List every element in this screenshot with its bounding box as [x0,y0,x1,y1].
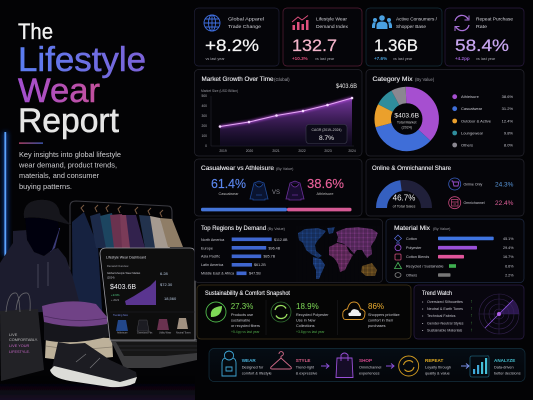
step: style [271,352,317,376]
icon: leaf [206,302,226,322]
legend: Athleisure [461,94,480,99]
tablet dashboard: +9.6% [111,293,120,297]
title: The [18,19,53,44]
panel: category mix donut: (2024) [402,126,412,130]
tablet dashboard: (2024) [107,276,115,280]
step: analyze [470,356,521,377]
CAGR callout: 8.7% [319,135,334,142]
material rows: 45.1% [503,237,514,241]
panel: top regions [194,219,382,282]
KPI card: active consumers: Active Consumers / [396,16,438,22]
laptop keyboard [110,339,197,368]
title underline [19,142,43,144]
panel: trend watch: Trend Watch [422,290,452,297]
panel: online and omnichannel share: Online & Omnichannel Share [372,165,452,172]
hero photo: lifestyle wear still life [0,132,197,400]
region bars: North America [201,238,225,242]
KPI card: trade change [194,8,279,66]
step: style: Trend-right [296,366,315,370]
step: repeat: REPEAT [425,358,443,363]
panel: top regions: Top Regions by Demand [201,225,267,232]
panel: market growth line chart: (Global) [274,77,290,82]
panel: sustainability snapshot: Use in New [296,318,316,322]
x axis [219,149,356,153]
intro text: wear demand, product trends, [18,162,117,170]
KPI card: repeat purchase: Repeat Purchase [476,16,513,22]
panel: online and omnichannel share: Omnichannel [464,201,485,205]
trend list: • [422,321,424,325]
radar [479,294,519,334]
KPI card: trade change: Global Apparel [228,16,264,22]
title: Lifestyle [18,41,146,79]
icon: cloud [343,302,365,320]
material rows: 16.7% [503,255,514,259]
panel: material mix [386,219,524,282]
trend list: Sustainable Materials [427,328,462,332]
x axis: 2020 [246,149,253,153]
panel: sustainability snapshot: purchases [368,324,386,328]
icon: purple hoodie [286,181,304,200]
tablet dashboard: Oversized Fits [137,332,153,334]
panel: sustainability snapshot: Recycled Polyester [296,313,329,317]
KPI card: repeat purchase: vs last year [476,57,496,61]
step: wear: Designed for [242,366,264,370]
tablet dashboard: 18,560 [164,296,177,301]
panel: casualwear vs athleisure: Athleisure [317,192,333,196]
KPI card: active consumers: +7.6% [374,56,387,61]
KPI card: repeat purchase: +4.2pp [455,56,470,61]
tablet dashboard: Global Lifestyle Wear Market [107,271,141,275]
legend: 31.2% [502,106,513,111]
split bar [201,208,352,211]
floor [0,372,195,400]
tablet dashboard: Trending Now [113,314,128,317]
step: wear: comfort & lifestyle [242,372,272,376]
panel: sustainability snapshot: 18.9% [296,302,319,311]
region bars: Middle East & Africa [201,272,235,276]
material rows: Cotton Blends [406,255,429,259]
tablet dashboard [100,248,195,340]
intro text: materials, and consumer [19,172,100,180]
y axis: 200 [201,124,207,128]
panel: casualwear vs athleisure: Casualwear vs Athleisure [201,165,275,172]
icon: recycle [271,302,291,322]
KPI card: demand index: +10.3% [292,56,308,61]
trend list [422,299,473,334]
trend list: Oversized Silhouettes [427,300,463,304]
y axis: 400 [201,104,207,108]
shopping bag: COMFORTABLY. [9,338,38,342]
panel: casualwear vs athleisure [194,159,362,216]
region bars: Latin America [201,263,224,267]
region bars: $47.5B [249,272,261,276]
x axis: 2022 [298,149,306,153]
KPI card: demand index [283,8,362,66]
trend list: • [422,314,424,318]
KPI card: repeat purchase: 58.4% [455,37,509,55]
flow strip: wear to analyze [209,348,525,382]
panel: sustainability snapshot: or recycled fibers [231,324,260,328]
step: shop: Omnichannel [359,366,382,370]
step: wear [222,351,272,376]
KPI card: active consumers: Shopper Base [396,24,426,29]
intro text [18,151,121,191]
KPI card: demand index: Demand Index [316,24,349,29]
panel: online and omnichannel share: of Total Sales [393,204,415,208]
shopping bag: LIVE [9,333,18,337]
tablet dashboard: Athleisure [117,332,128,334]
half donut gauge [382,186,426,208]
material rows: Recycled / Sustainable [406,264,444,268]
step: repeat [399,356,451,376]
trend list: ↑ [470,299,473,305]
panel: sustainability snapshot: Sustainability & Comfort Snapshot [205,290,290,297]
panel: online and omnichannel share [366,159,524,216]
y axis: 100 [201,134,207,138]
tablet dashboard: Utility Wear [159,332,171,334]
trend list: ↑ [470,313,473,319]
panel: sustainability snapshot: +5.4pp vs last year [231,330,260,334]
region bars: $96.4B [268,246,281,250]
region bars: $85.7B [264,254,276,258]
panel: sustainability snapshot: comfort in their [368,318,394,322]
panel: category mix donut: $403.6B [394,112,420,120]
panel: sustainability snapshot: 86% [368,302,384,311]
KPI card: demand index: 132.7 [292,37,337,55]
step: style: STYLE [296,358,311,363]
icon: globe [204,15,220,31]
material rows: Polyester [406,246,422,250]
panel: sustainability snapshot: Shoppers prioritize [368,313,400,317]
x axis: 2024 [348,149,356,153]
step: analyze: ANALYZE [494,358,515,363]
region bars: Asia Pacific [201,254,220,258]
trend list: Technical Fabrics [427,314,456,318]
legend: 12.4% [502,118,513,124]
tablet dashboard: + 2023 [111,298,120,302]
icon: repeat arrows [455,15,469,31]
intro text: Key insights into global lifestyle [19,151,121,159]
icon: blue hoodie [250,181,268,200]
y axis: 0 [205,144,207,148]
icon: omnichannel store [449,197,461,209]
region bars: $112.8B [274,238,288,242]
panel: casualwear vs athleisure: (By Value) [276,167,294,171]
trend list: • [422,300,424,304]
panel: casualwear vs athleisure: VS [272,190,280,196]
panel: category mix donut: (By Value) [415,77,435,82]
panel: casualwear vs athleisure: 38.6% [307,176,344,191]
shopping bag [0,293,44,381]
trend list: Neutral & Earth Tones [427,307,463,311]
panel: sustainability snapshot: 27.3% [231,302,253,311]
panel: market growth line chart: $403.6B [336,84,357,90]
panel: market growth line chart [194,70,362,156]
y axis [201,94,207,148]
trend list: Gender-Neutral Styles [427,321,464,325]
legend: Loungewear [461,130,484,136]
shopping bag: LIFESTYLE. [9,350,30,354]
legend: Outdoor & Active [461,118,492,124]
sneaker [50,342,137,387]
KPI card: active consumers: 1.36B [374,37,418,55]
CAGR callout [306,124,347,144]
panel: online and omnichannel share: Online Only [464,182,482,186]
KPI card: active consumers [366,8,442,66]
panel: category mix donut [366,70,524,156]
panel: sustainability snapshot: Products use [231,313,253,317]
step: analyze: better decisions [494,372,521,376]
step: shop [336,353,382,378]
step: style: & expressive [296,372,317,376]
panel: online and omnichannel share: 24.3% [495,182,514,188]
legend: Others [461,142,473,148]
legend [452,94,513,148]
trend list: • [422,307,424,311]
KPI card: trade change: +8.2% [205,37,259,55]
region bars: $61.2B [254,263,266,267]
icon: people [372,15,392,29]
neon light bar [3,132,8,256]
arrow [321,364,329,368]
panel: market growth line chart: Market Growth Over Time [202,76,274,83]
KPI card: demand index: Lifestyle Wear [316,16,347,22]
clothes rack [70,201,183,340]
material rows: 29.4% [503,246,514,250]
tablet dashboard: 6.28 [160,271,169,276]
panel: sustainability snapshot: +3.8pp vs last year [296,330,325,334]
region bars [201,238,288,276]
legend: 8.0% [504,142,513,148]
tablet dashboard: Demand Overview [107,264,128,268]
x axis: 2019 [219,149,227,153]
region bars: Europe [201,246,213,250]
KPI card: trade change: vs last year [206,57,225,61]
legend: Casualwear [461,106,483,111]
world map [296,226,380,282]
arrow [461,364,469,368]
x axis: 2021 [272,149,280,153]
y axis: 300 [201,114,207,118]
material rows: Cotton [406,237,417,241]
legend: 9.8% [504,130,513,136]
panel: online and omnichannel share: 46.7% [393,194,415,202]
panel: top regions: (By Value) [268,227,286,231]
intro text: buying patterns. [19,183,72,191]
panel: material mix: (By Value) [433,227,451,231]
panel: material mix: Material Mix [394,225,431,232]
step: repeat: quality & value [425,372,450,376]
arrow [386,364,394,368]
panel: category mix donut: Category Mix [372,76,413,83]
step: analyze: Data-driven [494,366,514,370]
material rows: 6.6% [505,264,514,268]
y axis: 500 [201,94,207,98]
title: Wear [18,72,100,110]
panel: trend watch [414,285,524,339]
x axis: 2023 [324,149,332,153]
KPI card: demand index: vs last year [315,57,335,61]
title: Report [18,102,120,140]
panel: casualwear vs athleisure: Casualwear [218,192,239,196]
KPI card: repeat purchase [445,8,524,66]
panel: sustainability snapshot: Collections [296,324,315,328]
donut chart [383,95,431,143]
KPI card: trade change: Trade Change [228,24,261,29]
tablet dashboard: Lifestyle Wear Dashboard [106,256,146,260]
panel: online and omnichannel share: 22.4% [495,200,514,207]
area and line [219,97,353,146]
trend list: ↑ [470,320,473,326]
trend list: ↑ [470,306,473,312]
material rows: Others [406,274,417,278]
tablet dashboard: Neutral Tones [176,332,192,334]
folded clothes stack [42,301,113,360]
panel: sustainability snapshot [197,285,411,339]
step: shop: SHOP [359,358,372,363]
panel: market growth line chart: Market Size (USD Billion) [201,89,238,93]
trend list: ↑ [470,328,473,334]
title [18,19,146,140]
step: repeat: Loyalty through [425,366,451,370]
hoodie on mannequin [0,200,80,314]
step: shop: experiences [359,372,380,376]
shopping bag: LIVE YOUR [9,344,29,348]
legend: 38.6% [502,94,513,99]
panel: casualwear vs athleisure: 61.4% [211,176,246,191]
CAGR callout: CAGR (2019–2024) [312,128,341,132]
trend list: • [422,328,424,332]
icon: online cart [449,178,461,190]
KPI card: repeat purchase: Rate [476,24,487,29]
material rows: 2.2% [505,274,514,278]
panel: category mix donut: Total Market [397,120,416,124]
tablet dashboard: $403.6B [110,284,136,291]
icon: bars [292,16,308,30]
KPI card: active consumers: vs last year [393,57,413,61]
tablet dashboard: $72.30 [160,282,173,287]
step: wear: WEAR [242,358,256,363]
material rows [394,235,514,278]
panel: sustainability snapshot: sustainable [231,318,250,322]
